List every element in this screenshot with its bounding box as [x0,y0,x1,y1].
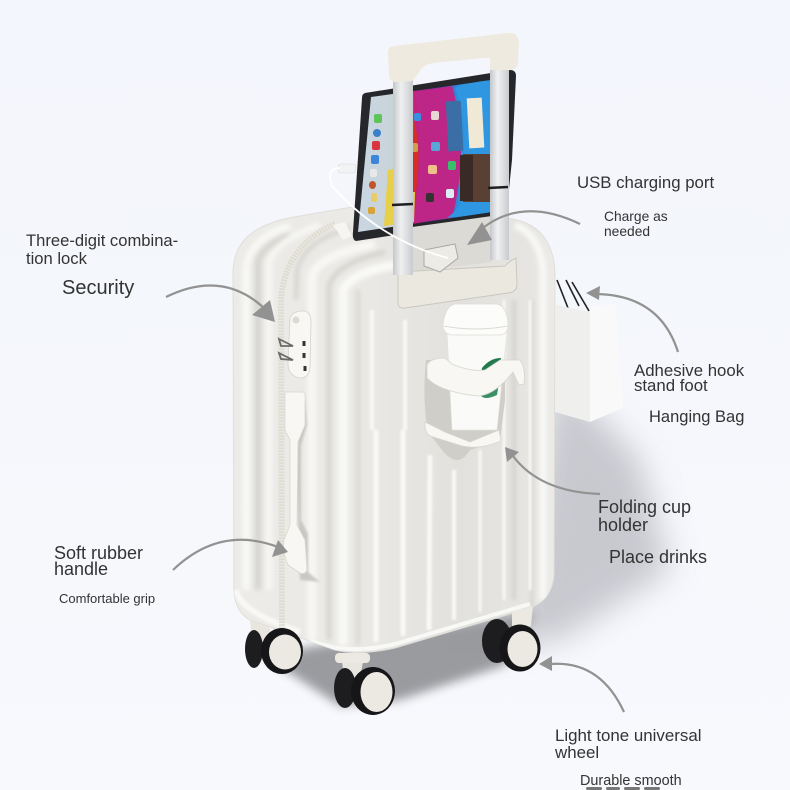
arrow: lock [166,285,275,322]
cup [447,332,507,430]
label: wheel: Light tone universal [555,726,701,745]
side carry handle [284,392,320,582]
upper ring [427,358,524,396]
label: wheel: wheel [554,743,599,762]
wheel: front [334,653,395,715]
label: hanging bag: Hanging Bag [649,408,744,426]
caster wheels [245,606,540,715]
tablet screen [358,80,492,232]
bottom rim [310,604,530,649]
label: USB charging port: needed [604,224,650,239]
label: cup holder: Place drinks [609,547,707,567]
handle grip [388,33,519,82]
label: cup holder: holder [598,515,648,535]
label: rubber handle: handle [54,559,108,579]
lower ring [425,422,501,447]
recess wall [405,216,492,272]
hanging bag [555,280,623,422]
cup holder and cup [424,304,524,460]
cropped dark text remnants [586,787,660,790]
label: wheel: Durable smooth [580,773,682,789]
label: combination lock: Three-digit combina- [26,231,178,250]
arrow: wheel [539,656,624,712]
zipper pulls [279,339,293,360]
shell contours [246,225,543,645]
retaining bands [392,187,508,205]
label: USB charging port: Charge as [604,209,668,224]
label: hanging bag [634,361,745,426]
label: cup holder [598,497,707,567]
label: USB charging port [577,173,714,239]
label: hanging bag: stand foot [634,376,708,395]
zipper [281,224,335,640]
suitcase body [233,207,555,654]
telescopic handle [388,33,519,275]
combination lock [279,311,311,378]
label: combination lock: Security [62,277,134,299]
handle recess panel [398,216,517,308]
label: cup holder: Folding cup [598,497,691,517]
arrow: cup holder [505,447,600,494]
callout arrows [166,211,678,712]
cup logo [480,358,501,385]
recess [424,360,505,460]
charging cable [330,164,448,258]
label: rubber handle [54,543,155,606]
front face light ribs [372,300,530,642]
label: wheel [554,726,701,789]
arrow: rubber handle [173,540,288,570]
label: rubber handle: Soft rubber [54,543,143,563]
label: hanging bag: Adhesive hook [634,361,745,380]
zipper pull at top [333,222,352,240]
app icons [368,111,456,214]
label: rubber handle: Comfortable grip [59,591,155,606]
label: USB charging port: USB charging port [577,173,714,192]
wheel: rear left [245,620,303,674]
wheel: right [482,606,540,672]
tablet frame [353,70,516,241]
arrow: hanging bag [586,286,678,352]
USB module [424,244,458,272]
floor shadow [262,370,670,706]
handle poles [393,80,413,275]
label: combination lock [26,231,178,299]
arrow: USB port [467,211,580,245]
tablet [353,70,516,241]
widgets [446,101,463,151]
label: combination lock: tion lock [26,249,88,268]
